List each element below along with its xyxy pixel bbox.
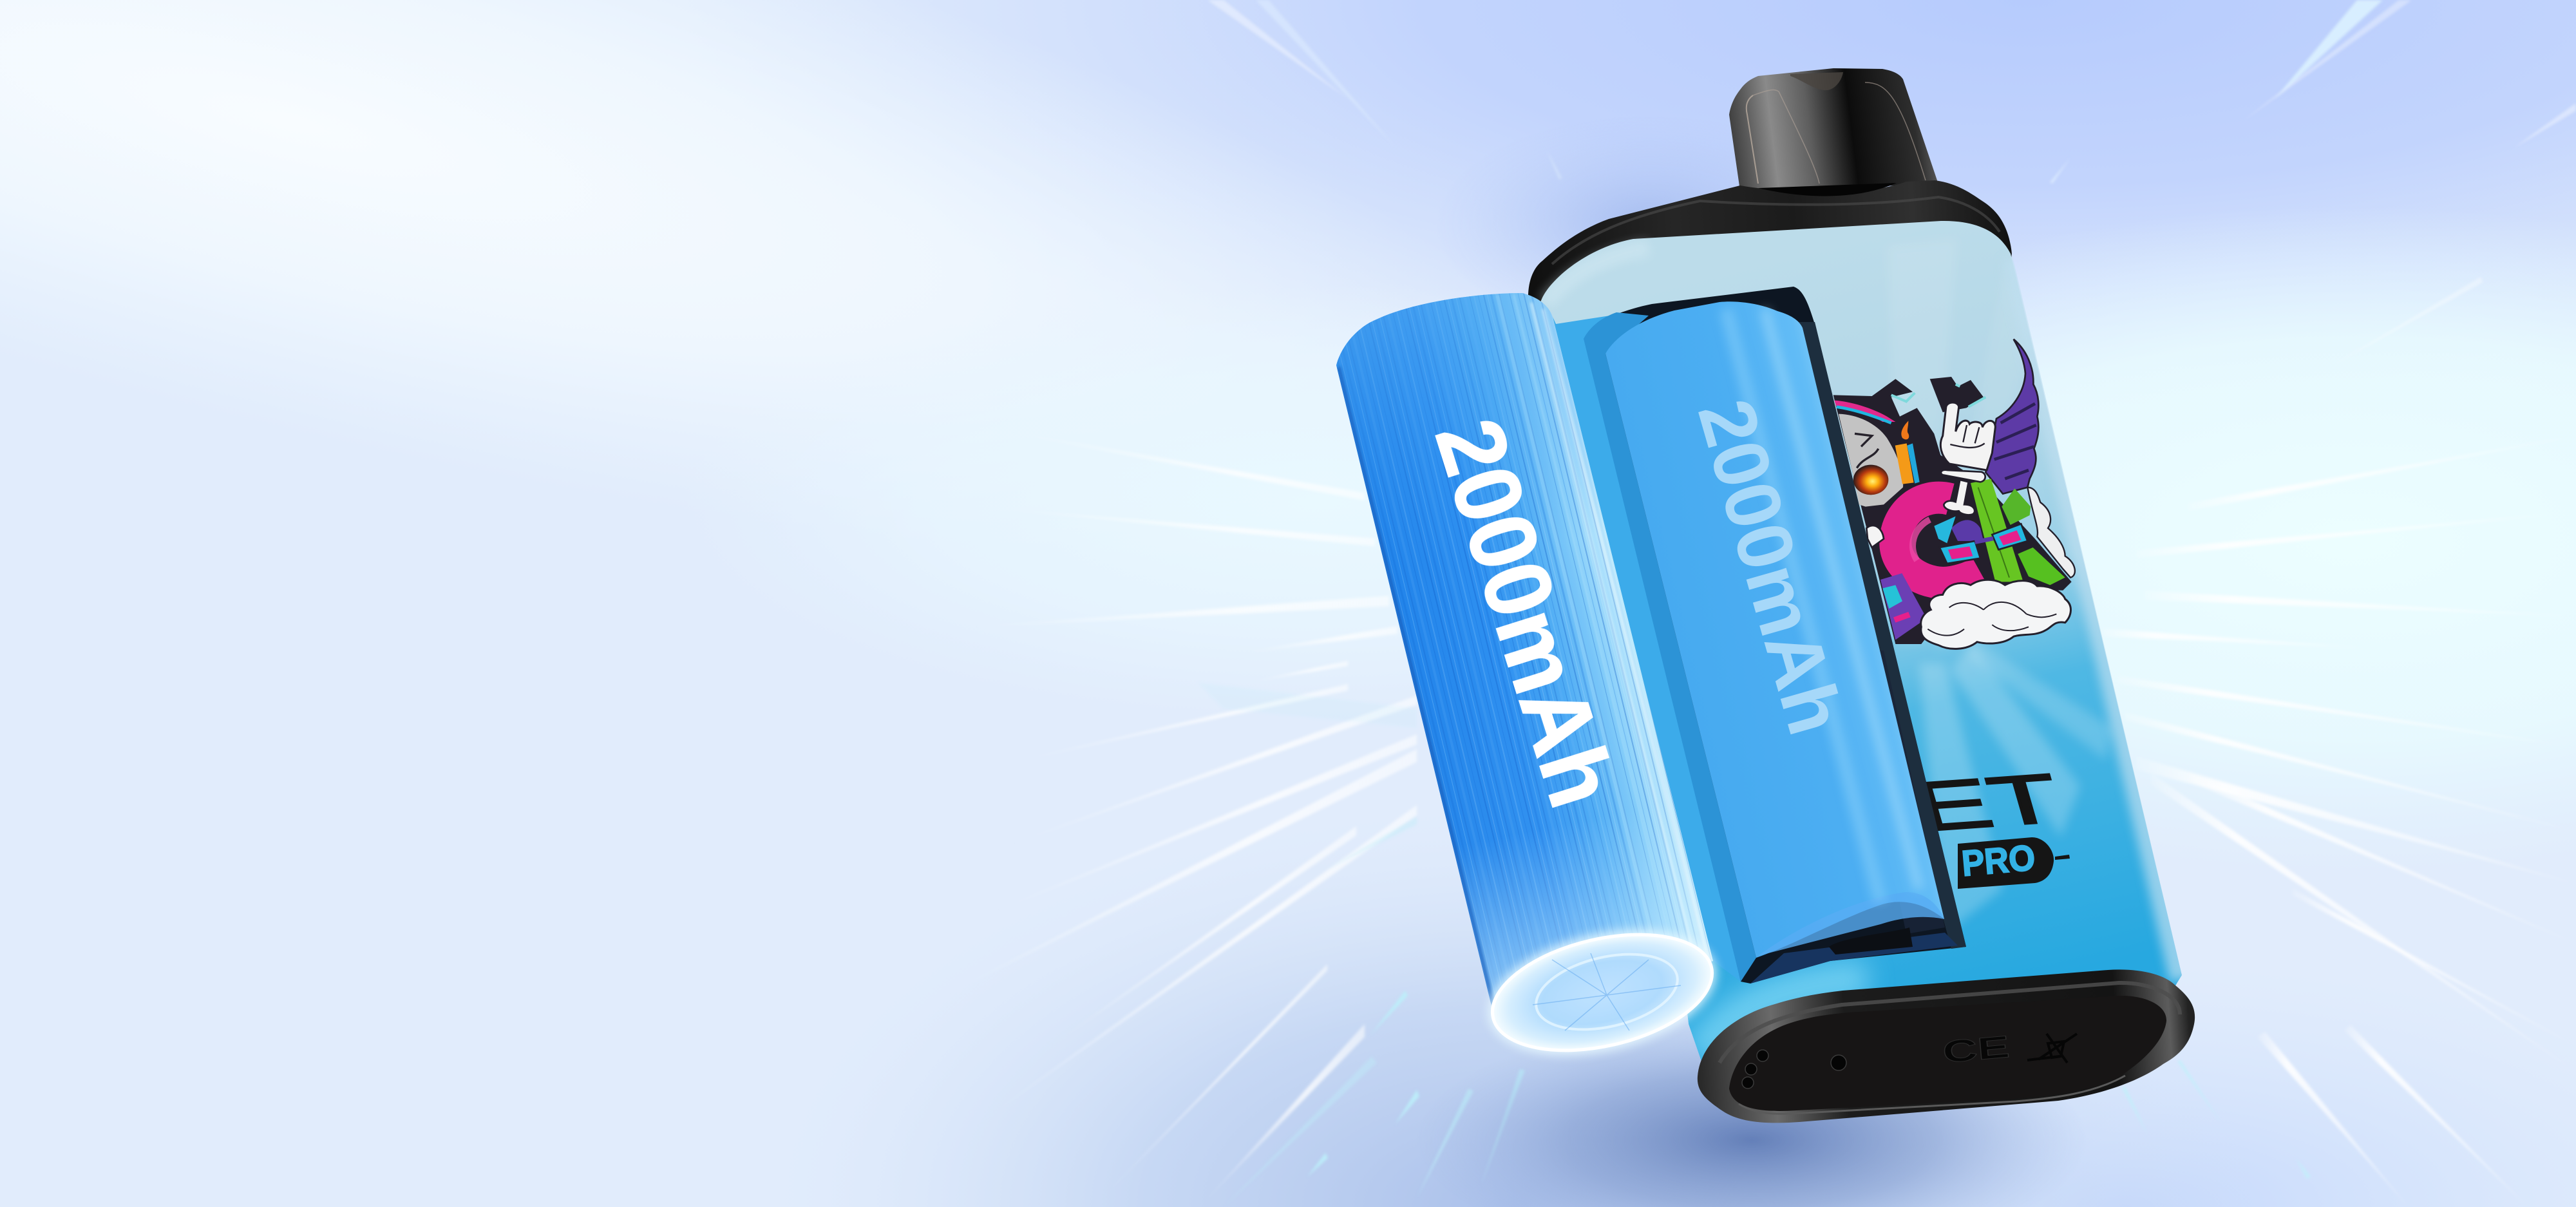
battery end glow [1476,910,1728,1075]
character artwork [1833,339,2075,649]
battery cylinder [1314,277,1752,1063]
wing [1985,339,2038,494]
glowing eye [1853,465,1888,495]
rock hand with bone arm [1940,403,1995,515]
base air holes [1742,1050,1846,1088]
green letter K [1971,479,2065,585]
battery cell shadow side [1584,312,1756,982]
CE mark: CE [1941,1030,2011,1070]
recycling bin mark [2027,1034,2077,1063]
mouthpiece [1729,68,1938,191]
logo lettering: ET [1906,760,2069,846]
body sunburst rays [1917,643,2112,926]
letters C K backing [1833,379,2072,644]
battery window [1581,287,1966,984]
pink letter C [1895,498,1980,583]
translucent battery strip [1553,316,1741,982]
right bones and puffs [2027,488,2075,578]
device [1314,68,2195,1123]
candle [1895,421,1920,484]
3D glasses [1940,524,2027,564]
base cap [1698,969,2195,1123]
battery highlight strands [1338,294,1708,1005]
collar [1528,180,2012,303]
logo lettering: PRO [1960,837,2037,884]
outer capacity text: 2000mAh [1416,407,1636,819]
purple blob [1951,520,1984,541]
smoke cloud [1921,580,2070,649]
light rays right [2103,436,2576,1207]
body shell [1540,221,2183,1095]
cloud puff left [1866,526,1884,547]
cassette [1880,573,1927,640]
light rays left [937,431,1417,1207]
battery end face [1481,915,1723,1070]
blue axe [1934,517,1956,543]
inner capacity text: 2000mAh [1681,390,1860,744]
battery cell front [1605,301,1944,958]
skull [1839,414,1903,507]
cyan streaks [1198,683,1525,1207]
logo lettering [1906,760,2070,889]
cyan streaks right [2122,1060,2311,1179]
light rays top [1208,0,2576,370]
headband [1834,401,1895,422]
